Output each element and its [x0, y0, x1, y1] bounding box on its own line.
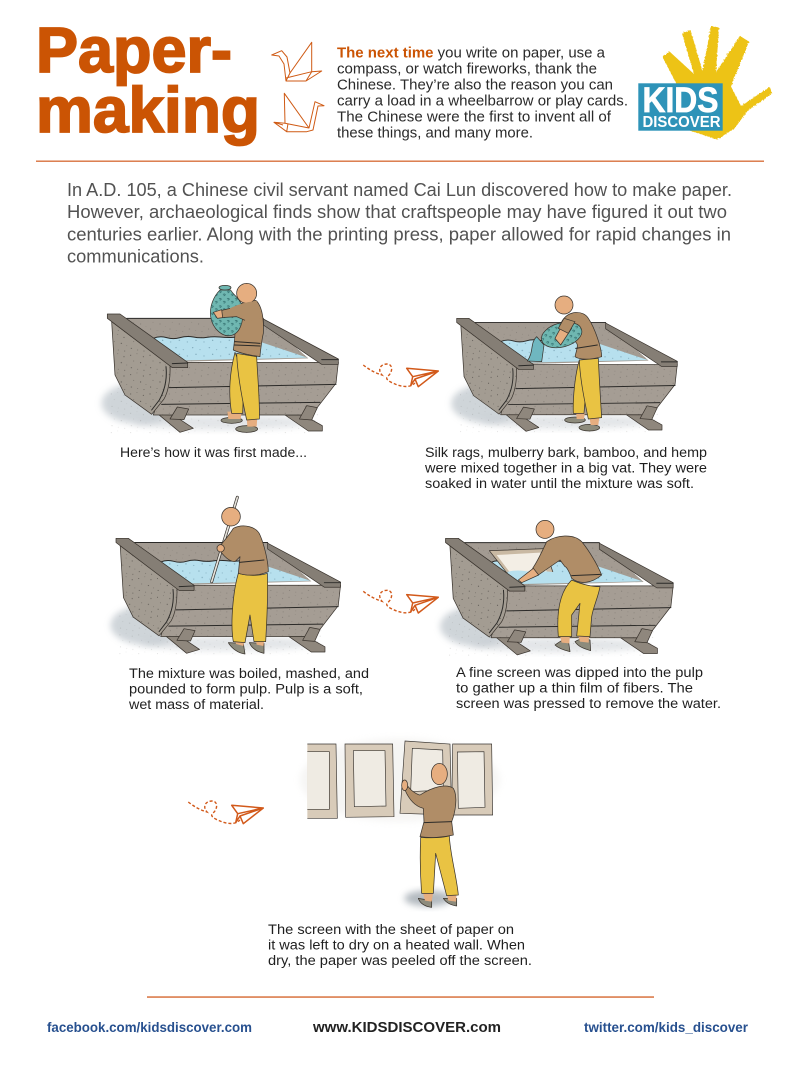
- footer links: www.KIDSDISCOVER.com: [312, 1019, 501, 1036]
- intro text: [67, 180, 732, 266]
- caption 2: Silk rags, mulberry bark, bamboo, and hemp: [425, 445, 707, 460]
- figure: man dipping screen: [518, 520, 602, 652]
- footer links: twitter.com/kids_discover: [584, 1020, 749, 1035]
- caption 4: screen was pressed to remove the water.: [456, 696, 721, 711]
- logo: Kids Discover: KIDS: [642, 81, 718, 120]
- lead paragraph: Chinese. They’re also the reason you can: [337, 78, 613, 94]
- figure: man hanging screen: [402, 763, 458, 907]
- plane arrow: [363, 590, 438, 613]
- lead paragraph: [337, 46, 628, 142]
- caption 1: Here’s how it was first made...: [120, 445, 307, 460]
- figure: man holding jar: [210, 283, 263, 432]
- caption 4: to gather up a thin film of fibers. The: [456, 680, 693, 696]
- lead paragraph: these things, and many more.: [337, 126, 533, 142]
- caption 4: A fine screen was dipped into the pulp: [456, 665, 703, 680]
- caption 3: pounded to form pulp. Pulp is a soft,: [129, 682, 363, 696]
- screen frames: [307, 741, 493, 818]
- logo: Kids Discover: DISCOVER: [642, 114, 720, 131]
- caption 3: The mixture was boiled, mashed, and: [129, 666, 369, 681]
- caption 3: wet mass of material.: [128, 697, 264, 712]
- plane arrow: [363, 364, 438, 387]
- footer links: facebook.com/kidsdiscover.com: [47, 1020, 252, 1035]
- panel: step 2 vat pouring: [451, 318, 677, 432]
- title: Paper-: [36, 14, 232, 86]
- intro text: However, archaeological finds show that craftspeople may have figured it out two: [67, 202, 727, 222]
- caption 2: soaked in water until the mixture was soft.: [425, 476, 694, 491]
- caption 3: [128, 666, 369, 712]
- footer links: [47, 1019, 749, 1036]
- caption 5: it was left to dry on a heated wall. When: [268, 938, 525, 952]
- caption 4: [456, 665, 721, 711]
- panel: step 4 vat with screen: [440, 538, 673, 656]
- lead paragraph: carry a load in a wheelbarrow or play cards.: [337, 94, 628, 110]
- screen in pulp: [489, 549, 568, 583]
- icon: origami cranes: [272, 42, 324, 132]
- intro text: communications.: [67, 246, 204, 266]
- lead paragraph: The Chinese were the first to invent all of: [337, 110, 612, 126]
- title: [36, 14, 260, 146]
- caption 2: were mixed together in a big vat. They were: [424, 460, 707, 476]
- panel: step 3 vat stirring: [110, 538, 341, 654]
- caption 2: [424, 445, 707, 491]
- panel: step 1 vat with jar: [102, 283, 338, 433]
- caption 5: dry, the paper was peeled off the screen.: [268, 953, 532, 968]
- lead paragraph: The next time you write on paper, use a: [337, 46, 606, 62]
- intro text: centuries earlier. Along with the printing press, paper allowed for rapid changes in: [67, 224, 731, 244]
- lead paragraph: compass, or watch fireworks, thank the: [337, 62, 597, 78]
- figure: man pouring jar: [527, 296, 602, 431]
- logo: Kids Discover: [638, 26, 772, 140]
- title: making: [36, 74, 260, 146]
- caption 5: [268, 922, 532, 968]
- plane arrow: [188, 801, 263, 824]
- vat rail over screen: [446, 538, 525, 591]
- intro text: In A.D. 105, a Chinese civil servant named Cai Lun discovered how to make paper.: [67, 180, 732, 200]
- caption 5: The screen with the sheet of paper on: [268, 922, 514, 937]
- panel: step 5 screens on wall: [300, 738, 500, 907]
- figure: man stirring with pole: [212, 497, 268, 654]
